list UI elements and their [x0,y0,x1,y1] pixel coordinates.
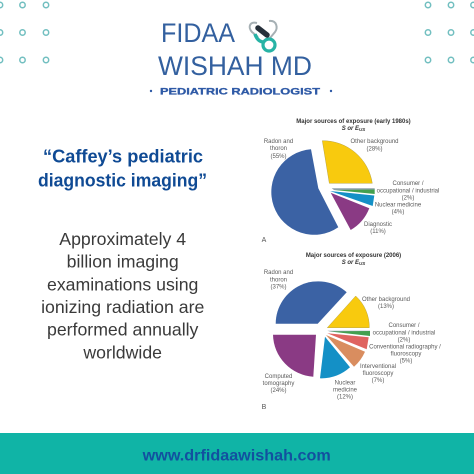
chart A title: S or E [342,126,359,132]
labels A: (55%) [270,154,287,160]
labels A: Diagnostic [364,222,392,228]
labels A: (11%) [370,229,386,235]
labels B [262,270,441,411]
icon: stethoscope [250,21,277,51]
heading: diagnostic imaging” [38,170,207,190]
labels B: fluoroscopy [363,371,393,377]
logo [150,18,332,98]
labels B: tomography [263,381,294,387]
labels B: Nuclear [335,380,355,386]
labels B: (13%) [378,304,394,310]
text block: performed annually [47,320,199,340]
labels B: thoron [270,278,287,284]
text block: examinations using [47,274,198,294]
chart B title: S or E [342,260,359,266]
labels B: (7%) [372,378,384,384]
labels A: thoron [270,146,287,152]
text block: worldwide [82,342,162,362]
chart B title: Major sources of exposure (2006) [306,253,401,259]
logo name: FIDAA [161,18,235,48]
labels A: (2%) [402,196,414,202]
labels B: Computed [265,374,292,380]
decorative dots: top left [0,2,49,63]
chart A title: US [359,127,365,132]
text block [41,229,204,362]
chart B title: US [359,261,365,266]
labels B: fluoroscopy [391,352,421,358]
labels A: A [262,237,267,244]
heading [38,146,207,190]
labels A: Consumer / [392,181,424,187]
text block: billion imaging [67,252,179,272]
labels A [262,139,439,244]
slices A [271,141,375,235]
labels A: Radon and [264,139,293,145]
labels A: Nuclear medicine [375,202,422,208]
labels B: (2%) [398,338,410,344]
labels B: (24%) [270,388,287,394]
labels B: (5%) [400,358,412,364]
labels B: Other background [362,297,410,303]
labels B: Consumer / [388,323,420,329]
labels B: Conventional radiography / [369,344,441,350]
heading: “Caffey’s pediatric [43,146,203,166]
labels B: occupational / industrial [373,330,435,336]
footer band [0,433,474,474]
labels B: medicine [333,388,358,394]
labels A: (4%) [392,210,404,216]
chart A title: Major sources of exposure (early 1980s) [296,119,411,125]
decorative dots: top right [425,2,474,63]
slices B [273,281,370,378]
labels A: occupational / industrial [377,188,439,194]
labels A: Other background [350,139,399,145]
chart B title [306,253,401,266]
labels B: Radon and [264,270,293,276]
labels A: (28%) [366,146,383,152]
logo name [158,18,312,81]
text block: Approximately 4 [59,229,186,249]
chart: pie A 1980s [262,119,439,244]
text block: ionizing radiation are [41,297,204,317]
chart: pie B 2006 [262,253,441,411]
labels B: B [262,404,267,411]
logo tagline: PEDIATRIC RADIOLOGIST [160,86,320,98]
website url: www.drfidaawishah.com [142,448,331,464]
labels B: Interventional [360,364,396,370]
labels B: (37%) [270,284,287,290]
labels B: (12%) [337,394,353,400]
logo name: WISHAH MD [158,51,312,81]
chart A title [296,119,411,132]
